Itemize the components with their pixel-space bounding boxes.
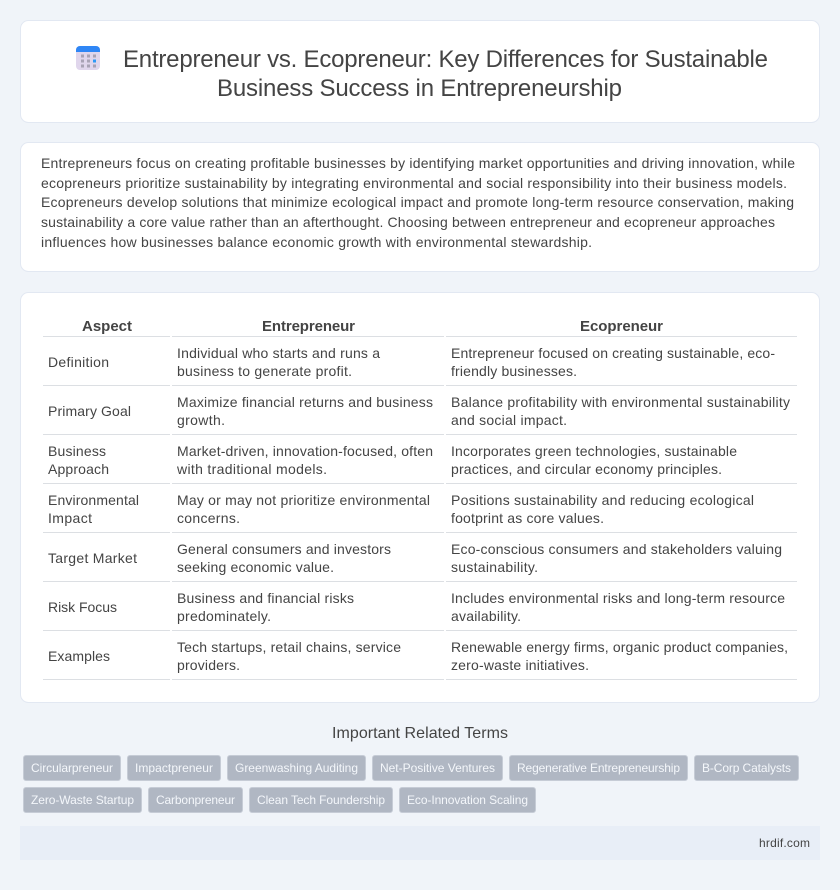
tag: Greenwashing Auditing: Greenwashing Auditing xyxy=(235,761,358,775)
row: target market: Target Market xyxy=(48,550,137,566)
row: business approach: with traditional models. xyxy=(176,461,327,477)
footer xyxy=(20,826,820,860)
tag: Clean Tech Foundership: Clean Tech Foundership xyxy=(257,793,385,807)
row: environmental impact xyxy=(48,492,754,526)
table header: Entrepreneur xyxy=(262,318,355,335)
tag: Clean Tech Foundership xyxy=(250,788,392,812)
row: target market: Eco-conscious consumers and stakeholders valuing xyxy=(451,541,782,557)
tag: Regenerative Entrepreneurship xyxy=(510,756,688,780)
icon: calendar xyxy=(76,46,100,70)
panel: comparison table xyxy=(20,292,820,702)
row: target market: sustainability. xyxy=(451,559,538,575)
row: definition xyxy=(48,345,775,379)
text block: introduction xyxy=(41,155,795,250)
row: examples xyxy=(48,639,788,673)
tag: Carbonpreneur: Carbonpreneur xyxy=(156,793,235,807)
table header: Aspect xyxy=(82,318,132,335)
table header xyxy=(82,318,663,335)
row: target market xyxy=(48,541,782,575)
row: definition: Entrepreneur focused on creating sustainable, eco- xyxy=(451,345,775,361)
row: business approach: practices, and circular economy principles. xyxy=(451,461,722,477)
tag: Net-Positive Ventures: Net-Positive Ventures xyxy=(380,761,495,775)
heading: important related terms: Important Related Terms xyxy=(332,725,508,742)
row: examples: providers. xyxy=(177,657,240,673)
tag: Greenwashing Auditing xyxy=(228,756,366,780)
row: examples: zero-waste initiatives. xyxy=(451,657,589,673)
row: definition: Definition xyxy=(48,354,109,370)
row: environmental impact: Positions sustainability and reducing ecological xyxy=(451,492,754,508)
row: environmental impact: Impact xyxy=(48,510,92,526)
panel: header xyxy=(20,20,820,122)
row: primary goal: growth. xyxy=(177,412,225,428)
row: examples: Examples xyxy=(48,648,110,664)
row: risk focus: predominately. xyxy=(177,608,271,624)
row: risk focus xyxy=(48,590,785,624)
row: target market: seeking economic value. xyxy=(177,559,334,575)
tags: related terms xyxy=(24,756,798,812)
row: business approach: Incorporates green technologies, sustainable xyxy=(451,443,737,459)
row: environmental impact: concerns. xyxy=(177,510,240,526)
tag: B-Corp Catalysts xyxy=(694,756,798,780)
row: definition: Individual who starts and runs a xyxy=(177,345,380,361)
row: risk focus: availability. xyxy=(451,608,521,624)
row: definition: friendly businesses. xyxy=(451,363,577,379)
row: primary goal: and social impact. xyxy=(451,412,567,428)
row: business approach: Approach xyxy=(48,461,109,477)
tag: Circularpreneur xyxy=(24,756,120,780)
panel: introduction xyxy=(20,142,820,272)
table rules xyxy=(43,336,797,680)
text block: introduction: ecopreneurs prioritize sustainability by integrating environmental and social responsibility into their business models. xyxy=(41,175,787,191)
text block: introduction: influences how businesses balance economic growth with environmental stewardship. xyxy=(41,234,592,250)
tag: Zero-Waste Startup: Zero-Waste Startup xyxy=(31,793,134,807)
footer source: hrdif.com xyxy=(759,836,810,850)
row: business approach: Market-driven, innovation-focused, often xyxy=(177,443,433,459)
text block: introduction: sustainability a core value rather than an afterthought. Choosing between entrepreneur and ecopreneur approaches xyxy=(41,214,775,230)
row: environmental impact: footprint as core values. xyxy=(451,510,604,526)
title: Business Success in Entrepreneurship xyxy=(217,75,622,102)
tag: Impactpreneur: Impactpreneur xyxy=(135,761,213,775)
tag: Net-Positive Ventures xyxy=(372,756,502,780)
table header: Ecopreneur xyxy=(580,318,663,335)
row: primary goal: Primary Goal xyxy=(48,403,131,419)
text block: introduction: Ecopreneurs develop solutions that minimize ecological impact and promote long-term resource conservation, making xyxy=(41,194,794,210)
row: environmental impact: May or may not prioritize environmental xyxy=(177,492,430,508)
row: examples: Tech startups, retail chains, service xyxy=(177,639,401,655)
text block: introduction: Entrepreneurs focus on creating profitable businesses by identifying market opportunities and driving innovation, while xyxy=(41,155,795,171)
row: primary goal: Maximize financial returns and business xyxy=(177,394,433,410)
row: examples: Renewable energy firms, organic product companies, xyxy=(451,639,788,655)
row: risk focus: Business and financial risks xyxy=(177,590,354,606)
row: business approach: Business xyxy=(48,443,106,459)
tag: B-Corp Catalysts: B-Corp Catalysts xyxy=(702,761,791,775)
title: Entrepreneur vs. Ecopreneur: Key Differences for Sustainable xyxy=(123,46,768,73)
row: primary goal: Balance profitability with environmental sustainability xyxy=(451,394,790,410)
tag: Carbonpreneur xyxy=(148,788,242,812)
row: primary goal xyxy=(48,394,790,428)
tag: Zero-Waste Startup xyxy=(24,788,142,812)
row: risk focus: Includes environmental risks and long-term resource xyxy=(451,590,785,606)
tag: Eco-Innovation Scaling: Eco-Innovation Scaling xyxy=(407,793,528,807)
row: risk focus: Risk Focus xyxy=(48,599,117,615)
title xyxy=(123,46,768,102)
tag: Circularpreneur: Circularpreneur xyxy=(31,761,113,775)
row: business approach xyxy=(48,443,737,477)
tag: Impactpreneur xyxy=(128,756,220,780)
tag: Regenerative Entrepreneurship: Regenerative Entrepreneurship xyxy=(517,761,680,775)
row: target market: General consumers and investors xyxy=(177,541,391,557)
row: definition: business to generate profit. xyxy=(177,363,352,379)
tag: Eco-Innovation Scaling xyxy=(400,788,536,812)
row: environmental impact: Environmental xyxy=(48,492,139,508)
